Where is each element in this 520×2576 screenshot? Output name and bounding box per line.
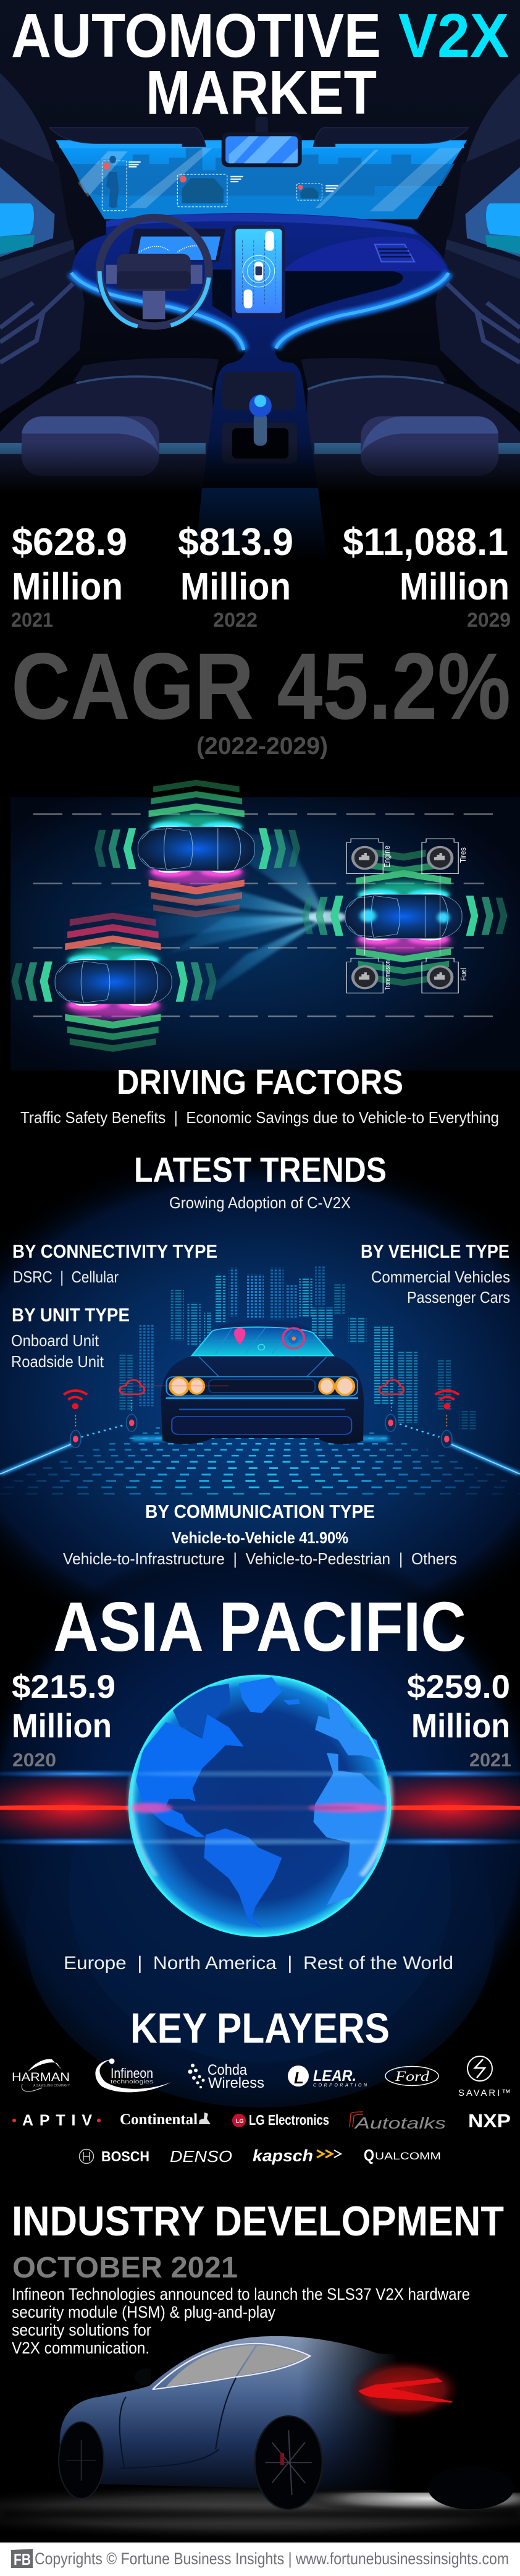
regional stat 2021: 2021 bbox=[469, 1749, 511, 1771]
october 2021 heading: OCTOBER 2021 bbox=[12, 2252, 238, 2284]
development text: security module (HSM) & plug-and-play bbox=[12, 2303, 275, 2321]
logo: Kapsch: kapsch bbox=[253, 2146, 313, 2165]
market stats: 2021 bbox=[11, 521, 127, 631]
dashboard with ambient light bbox=[71, 213, 450, 494]
logo: Harman bbox=[12, 2059, 70, 2091]
development text: security solutions for bbox=[12, 2321, 151, 2339]
regional stat 2020: $215.9 bbox=[12, 1669, 115, 1705]
regional stat 2020: Million bbox=[12, 1706, 112, 1745]
diagnostic gauge: tires bbox=[422, 839, 458, 874]
diagnostic gauge: fuel bbox=[422, 958, 458, 993]
logo: NXP: NXP bbox=[468, 2110, 511, 2132]
road panel: connected cars bbox=[10, 780, 520, 1070]
bottom-left car with sensors bbox=[11, 913, 217, 1052]
signal nodes bbox=[70, 1400, 452, 1447]
logo: Lear bbox=[288, 2065, 367, 2088]
segment: by unit type: BY UNIT TYPE bbox=[12, 1304, 130, 1326]
segment: by unit type: Roadside Unit bbox=[11, 1352, 104, 1371]
logo: LG Electronics: LG Electronics bbox=[249, 2112, 329, 2128]
title bbox=[11, 1, 509, 127]
latest trends heading: LATEST TRENDS bbox=[134, 1150, 387, 1190]
logo: LG Electronics: LG bbox=[236, 2118, 243, 2124]
key player logos bbox=[12, 2056, 511, 2166]
left cloud icon bbox=[120, 1380, 145, 1394]
gauge labels: Tires bbox=[458, 847, 468, 863]
logo: Qualcomm: UALCOMM bbox=[375, 2150, 441, 2162]
sports car photo bbox=[0, 2334, 520, 2541]
footer logo: FB bbox=[14, 2550, 31, 2569]
logo: Ford bbox=[385, 2067, 438, 2085]
logo: Ford: Ford bbox=[395, 2069, 430, 2084]
connected car front view bbox=[133, 1320, 364, 1444]
segment: by vehicle type bbox=[361, 1240, 510, 1307]
city skyline bbox=[119, 1266, 476, 1431]
asia pacific heading: ASIA PACIFIC bbox=[53, 1588, 466, 1666]
logo: Kapsch bbox=[253, 2146, 341, 2165]
logo: Cohda Wireless: Cohda bbox=[208, 2062, 248, 2078]
console fading below interior bbox=[195, 488, 327, 559]
logo: Lear: L bbox=[294, 2069, 304, 2087]
market stats: 2021: $628.9 bbox=[12, 521, 127, 564]
logo: LG Electronics bbox=[232, 2112, 329, 2128]
light flares behind globe bbox=[0, 1769, 520, 1846]
logo: Harman: HARMAN bbox=[12, 2071, 70, 2084]
continents bbox=[136, 1677, 388, 1928]
logo: Autotalks bbox=[350, 2112, 446, 2132]
regional stat 2020 bbox=[12, 1669, 115, 1771]
light beam from vehicle bbox=[66, 834, 346, 1016]
key players heading: KEY PLAYERS bbox=[130, 2004, 390, 2052]
right wifi icon bbox=[435, 1391, 459, 1426]
logo: Lear: CORPORATION bbox=[313, 2083, 367, 2088]
title: MARKET bbox=[146, 58, 377, 127]
market stats: 2029: $11,088.1 bbox=[343, 521, 508, 564]
latest trends text: Growing Adoption of C-V2X bbox=[169, 1193, 351, 1212]
logo: Lear: LEAR. bbox=[313, 2067, 356, 2085]
gauge labels: Transmission bbox=[384, 960, 392, 990]
smart city and car illustration bbox=[0, 1266, 520, 1494]
gear console and shifter bbox=[222, 372, 297, 464]
key players outer dome bbox=[25, 1761, 495, 2108]
sun visors and roof bbox=[50, 117, 468, 146]
windshield with augmented view bbox=[56, 140, 467, 219]
road lane markings bbox=[33, 814, 496, 1016]
road edge glow bbox=[0, 1424, 520, 1474]
logo: Continental: Continental bbox=[120, 2111, 198, 2128]
segmentation background glow bbox=[0, 1143, 520, 1663]
segment: by communication type bbox=[63, 1501, 457, 1568]
market stats: 2029 bbox=[343, 521, 511, 631]
driving factors heading: DRIVING FACTORS bbox=[117, 1062, 403, 1102]
right car with sensors bbox=[302, 847, 508, 986]
development text bbox=[12, 2285, 470, 2357]
center touch screen with car radar bbox=[232, 225, 285, 317]
CAGR: (2022-2029) bbox=[196, 733, 328, 760]
title: V2X bbox=[398, 1, 509, 70]
footer bbox=[0, 2542, 520, 2576]
gauge labels bbox=[382, 845, 468, 990]
segment: by communication type: BY COMMUNICATION TYPE bbox=[145, 1501, 375, 1522]
segment: by vehicle type: Passenger Cars bbox=[407, 1288, 510, 1307]
top-left car with sensors bbox=[94, 780, 300, 917]
gauge labels: Fuel bbox=[459, 968, 468, 981]
logo: Qualcomm: Q bbox=[364, 2146, 374, 2164]
segment: by unit type: Onboard Unit bbox=[11, 1331, 99, 1350]
other regions: Europe | North America | Rest of the World bbox=[64, 1953, 453, 1973]
market stats: 2021: 2021 bbox=[11, 609, 53, 631]
logo: Bosch: BOSCH bbox=[101, 2148, 149, 2164]
regional stat 2020: 2020 bbox=[12, 1749, 56, 1771]
gauge labels: Engine bbox=[382, 845, 392, 868]
car wheels bbox=[59, 2416, 514, 2509]
header illustration: car interior bbox=[0, 0, 520, 494]
segment: by unit type bbox=[11, 1304, 130, 1371]
rear-view mirror bbox=[222, 132, 302, 167]
development text: Infineon Technologies announced to launch the SLS37 V2X hardware bbox=[12, 2285, 470, 2303]
regional stat 2021: Million bbox=[411, 1706, 510, 1745]
diagnostic gauge: engine bbox=[346, 839, 383, 874]
title: AUTOMOTIVE bbox=[11, 1, 381, 70]
left front seat bbox=[0, 358, 219, 494]
header fade to black bbox=[0, 442, 520, 494]
right cloud icon bbox=[379, 1380, 404, 1394]
segment: by vehicle type: Commercial Vehicles bbox=[371, 1268, 510, 1286]
logo: Harman: A SAMSUNG COMPANY bbox=[33, 2084, 70, 2088]
digital road grid bbox=[0, 1428, 520, 1494]
development text: V2X communication. bbox=[12, 2339, 149, 2357]
segment: by connectivity type: DSRC | Cellular bbox=[13, 1268, 119, 1286]
logo: Cohda Wireless bbox=[188, 2062, 264, 2091]
logo: Savari: SAVARI™ bbox=[458, 2088, 511, 2098]
regional stat 2021 bbox=[407, 1669, 511, 1771]
key players inner dome bbox=[69, 1720, 451, 2062]
globe bbox=[126, 1675, 391, 1937]
regional background glow bbox=[0, 1533, 520, 2114]
steering wheel bbox=[99, 218, 209, 326]
market stats: 2022: Million bbox=[180, 566, 291, 608]
logo: Qualcomm bbox=[364, 2146, 441, 2164]
left door and seat pillar bbox=[0, 73, 85, 413]
market stats: 2022 bbox=[178, 521, 293, 631]
market stats: 2022: $813.9 bbox=[178, 521, 293, 564]
logo: Autotalks: Autotalks bbox=[353, 2114, 446, 2132]
logo: Infineon: technologies bbox=[111, 2078, 154, 2085]
instrument cluster bbox=[128, 229, 225, 261]
logo: Savari bbox=[458, 2056, 511, 2098]
logo: Aptiv: APTIV bbox=[22, 2112, 92, 2129]
market stats: 2029: Million bbox=[400, 566, 510, 608]
logo: Cohda Wireless: Wireless bbox=[208, 2075, 264, 2091]
market stats: 2022: 2022 bbox=[213, 609, 258, 631]
logo: Denso: DENSO bbox=[170, 2147, 232, 2166]
logo: Bosch bbox=[79, 2148, 149, 2164]
logo: Infineon bbox=[95, 2058, 171, 2092]
regional stat 2021: $259.0 bbox=[407, 1669, 510, 1705]
left wifi icon bbox=[64, 1391, 87, 1426]
market stats: 2029: 2029 bbox=[467, 609, 511, 631]
driving factors text: Traffic Safety Benefits | Economic Savings due to Vehicle-to Everything bbox=[20, 1108, 499, 1127]
diagnostic gauge: transmission bbox=[346, 958, 383, 993]
segment: by connectivity type bbox=[12, 1240, 217, 1286]
segment: by communication type: Vehicle-to-Vehicle 41.90% bbox=[172, 1528, 348, 1547]
logo: Infineon: Infineon bbox=[111, 2065, 153, 2081]
segment: by communication type: Vehicle-to-Infrastructure | Vehicle-to-Pedestrian | Others bbox=[63, 1549, 457, 1568]
segment: by connectivity type: BY CONNECTIVITY TYPE bbox=[12, 1240, 217, 1262]
market stats: 2021: Million bbox=[12, 566, 123, 608]
